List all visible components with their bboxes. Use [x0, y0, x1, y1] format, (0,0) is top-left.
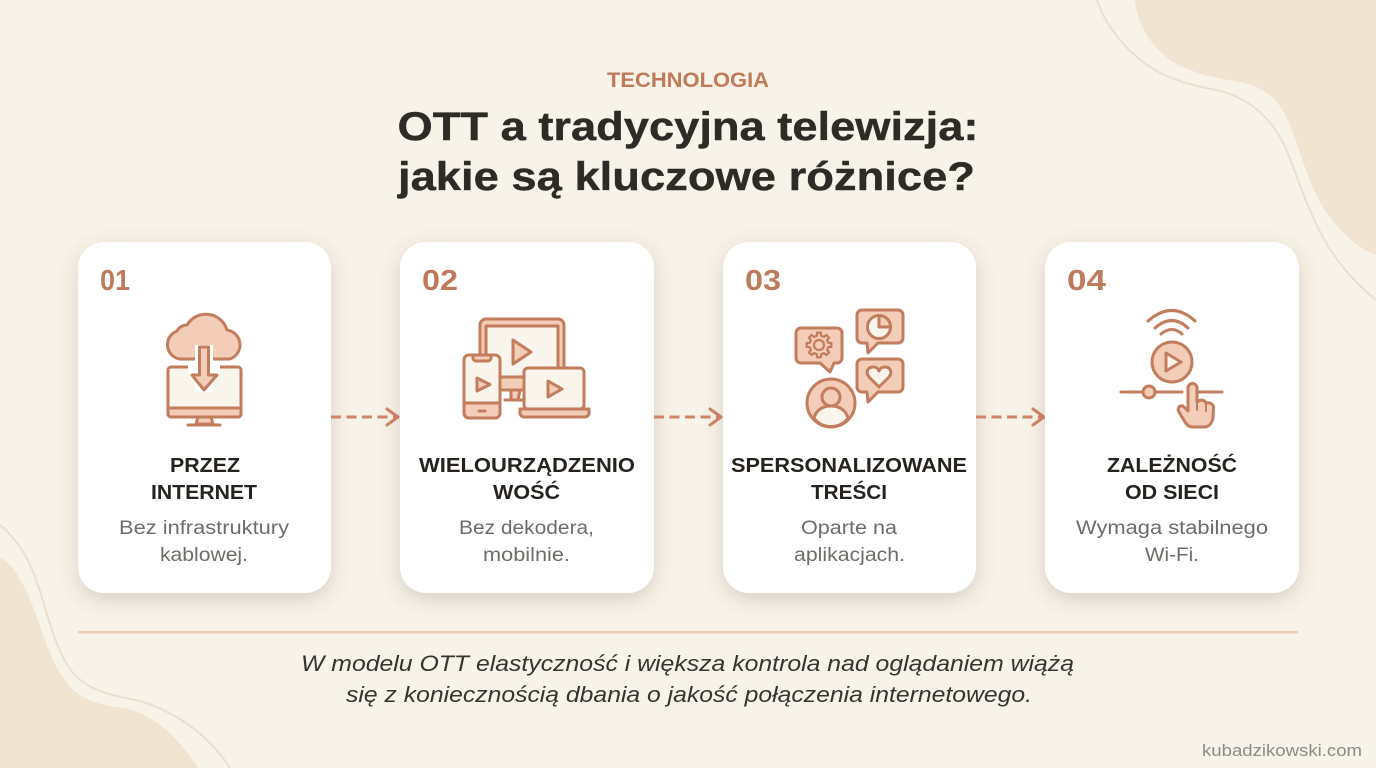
background curve: top right [1097, 0, 1376, 300]
card 04 heading [1107, 453, 1237, 504]
number 03: 03 [745, 265, 781, 297]
card 03 description: Oparte na [801, 518, 897, 539]
number 04: 04 [1067, 265, 1106, 297]
card 01: przez internet [78, 242, 331, 593]
card 01 description: Bez infrastruktury [119, 518, 290, 539]
card 02 description: Bez dekodera, [459, 518, 594, 539]
card 03 heading [731, 455, 967, 504]
card 01 heading: PRZEZ [170, 455, 240, 477]
card 04 heading: OD SIECI [1125, 482, 1219, 504]
card 03 heading: SPERSONALIZOWANE [731, 455, 967, 477]
footer credit: kubadzikowski.com [1202, 742, 1362, 760]
number 01: 01 [100, 265, 130, 297]
arrow 2 to 3 [654, 409, 721, 425]
background blob: bottom left [0, 558, 198, 768]
card 02 heading [419, 455, 635, 504]
title [397, 105, 978, 199]
card 01 heading [151, 455, 257, 504]
card 01 description [119, 518, 290, 566]
background blob: top right [1135, 0, 1376, 255]
summary text: się z koniecznością dbania o jakość połączenia internetowego. [346, 682, 1032, 707]
card 03 heading: TREŚCI [811, 480, 887, 504]
card 02 description: mobilnie. [483, 545, 570, 566]
eyebrow label: TECHNOLOGIA [607, 69, 769, 92]
icon: cloud download to monitor [167, 314, 241, 425]
icon: user with chat bubbles [796, 310, 903, 427]
card 04: zależność od sieci [1045, 242, 1299, 593]
arrow 1 to 2 [331, 409, 398, 425]
arrow 3 to 4 [976, 409, 1044, 425]
card 02 heading: WOŚĆ [493, 480, 560, 504]
card 02: wielourządzeniowość [400, 242, 654, 593]
summary text: W modelu OTT elastyczność i większa kontrola nad oglądaniem wiążą [301, 651, 1074, 676]
card 03 description: aplikacjach. [794, 545, 905, 566]
summary text [301, 651, 1074, 707]
card 04 heading: ZALEŻNOŚĆ [1107, 453, 1237, 477]
icon: wifi, play button, slider and hand [1121, 310, 1222, 427]
title: OTT a tradycyjna telewizja: [398, 105, 978, 149]
card 02 heading: WIELOURZĄDZENIO [419, 455, 635, 477]
card 02 description [459, 518, 594, 566]
card 04 description: Wymaga stabilnego [1076, 518, 1268, 539]
background curve: bottom left [0, 525, 230, 768]
icon: monitor, phone and laptop with play buttons [464, 319, 589, 418]
card 03 description [794, 518, 905, 566]
number 02: 02 [422, 265, 458, 297]
card 04 description [1076, 518, 1268, 566]
card 04 description: Wi-Fi. [1145, 545, 1199, 566]
title: jakie są kluczowe różnice? [397, 155, 975, 199]
card 01 heading: INTERNET [151, 482, 257, 504]
card 01 description: kablowej. [160, 545, 248, 566]
card 03: spersonalizowane treści [723, 242, 976, 593]
